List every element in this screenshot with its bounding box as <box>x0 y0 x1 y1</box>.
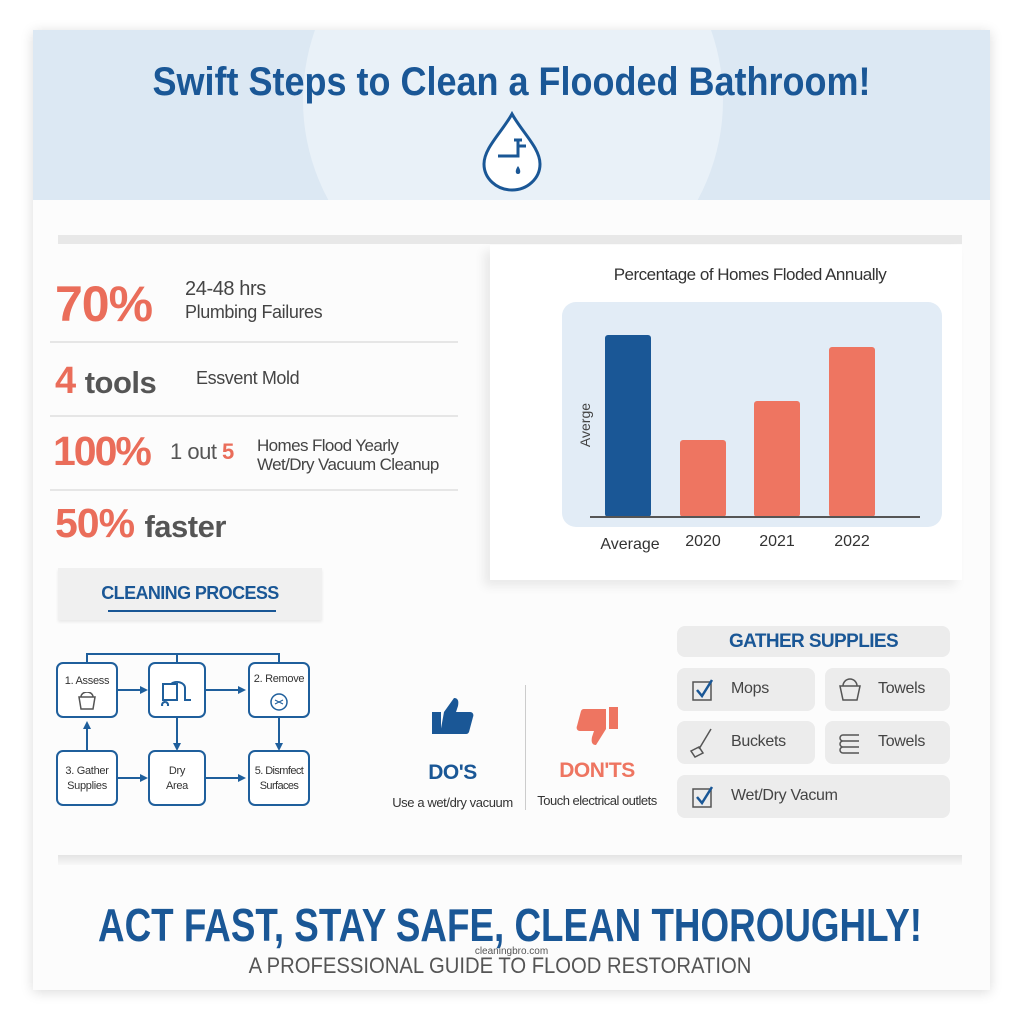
bar chart: 2022 <box>834 533 870 550</box>
step vacuum icon <box>148 662 206 718</box>
icon: thumbs down <box>576 707 618 745</box>
stat 100%: 100% <box>53 428 150 474</box>
icon: thumbs up <box>432 698 474 734</box>
step 1 assess: 1. Assess <box>65 675 109 687</box>
item buckets: Buckets <box>731 733 786 750</box>
step 3 gather: Supplies <box>67 780 107 792</box>
donts: Touch electrical outlets <box>537 793 657 808</box>
bar chart <box>562 302 942 553</box>
flowchart <box>56 653 310 806</box>
item towels bucket <box>825 668 950 711</box>
item towels <box>825 721 950 764</box>
item mops <box>677 668 815 711</box>
step 2 remove <box>248 662 310 718</box>
cleaning process label: CLEANING PROCESS <box>101 583 279 603</box>
item towels bucket: Towels <box>878 680 925 697</box>
bar chart: 2021 <box>759 533 795 550</box>
bar chart: 2020 <box>685 533 721 550</box>
item wet/dry vacuum <box>677 775 950 818</box>
step dry area: Area <box>166 780 188 792</box>
footer subtitle: A PROFESSIONAL GUIDE TO FLOOD RESTORATION <box>249 953 751 978</box>
stat 70%: 24-48 hrs <box>185 278 266 300</box>
stat 70%: 70% <box>55 276 152 332</box>
step 5 disinfect: Surfaces <box>260 780 298 792</box>
bar chart: Averge <box>577 403 593 447</box>
stat 4 tools: 4 tools <box>55 360 156 402</box>
item mops: Mops <box>731 680 769 697</box>
step dry area <box>148 750 206 806</box>
step 3 gather: 3. Gather <box>65 765 109 777</box>
bar chart: Average <box>600 536 660 553</box>
cleaning process label <box>58 568 322 620</box>
stat 50% faster: 50% faster <box>55 500 226 546</box>
donts: DON'TS <box>559 759 635 782</box>
stats panel <box>50 276 458 546</box>
stat 100%: 1 out 5 <box>170 439 234 464</box>
item wet/dry vacuum: Wet/Dry Vacum <box>731 787 838 804</box>
icon: water drop with faucet <box>482 111 542 192</box>
bottom divider shadow <box>58 855 962 865</box>
step 1 assess <box>56 662 118 718</box>
dos: DO'S <box>428 761 477 784</box>
dos <box>392 698 513 810</box>
gather supplies panel <box>677 626 950 818</box>
step 5 disinfect <box>248 750 310 806</box>
header band <box>33 30 990 200</box>
step dry area: Dry <box>169 765 185 777</box>
step 3 gather <box>56 750 118 806</box>
stat 100%: Wet/Dry Vacuum Cleanup <box>257 455 439 474</box>
step 5 disinfect: 5. Dismfect <box>255 765 303 777</box>
item towels: Towels <box>878 733 925 750</box>
watermark: cleaningbro.com <box>475 946 548 957</box>
stat 4 tools: Essvent Mold <box>196 368 299 388</box>
supplies header: GATHER SUPPLIES <box>729 631 898 652</box>
stat 4 tools <box>55 360 299 402</box>
stat 70% <box>55 276 322 332</box>
title: Swift Steps to Clean a Flooded Bathroom! <box>152 60 871 104</box>
donts <box>537 707 657 808</box>
footer slogan: ACT FAST, STAY SAFE, CLEAN THOROUGHLY! <box>98 899 922 951</box>
stat 100% <box>53 428 439 474</box>
stat 100%: Homes Flood Yearly <box>257 436 398 455</box>
dos: Use a wet/dry vacuum <box>392 795 513 810</box>
chart title: Percentage of Homes Floded Annually <box>614 265 886 284</box>
divider bar <box>58 235 962 244</box>
item buckets <box>677 721 815 764</box>
stat 70%: Plumbing Failures <box>185 302 322 322</box>
step 2 remove: 2. Remove <box>254 673 304 685</box>
supplies header <box>677 626 950 657</box>
chart panel <box>490 245 962 580</box>
